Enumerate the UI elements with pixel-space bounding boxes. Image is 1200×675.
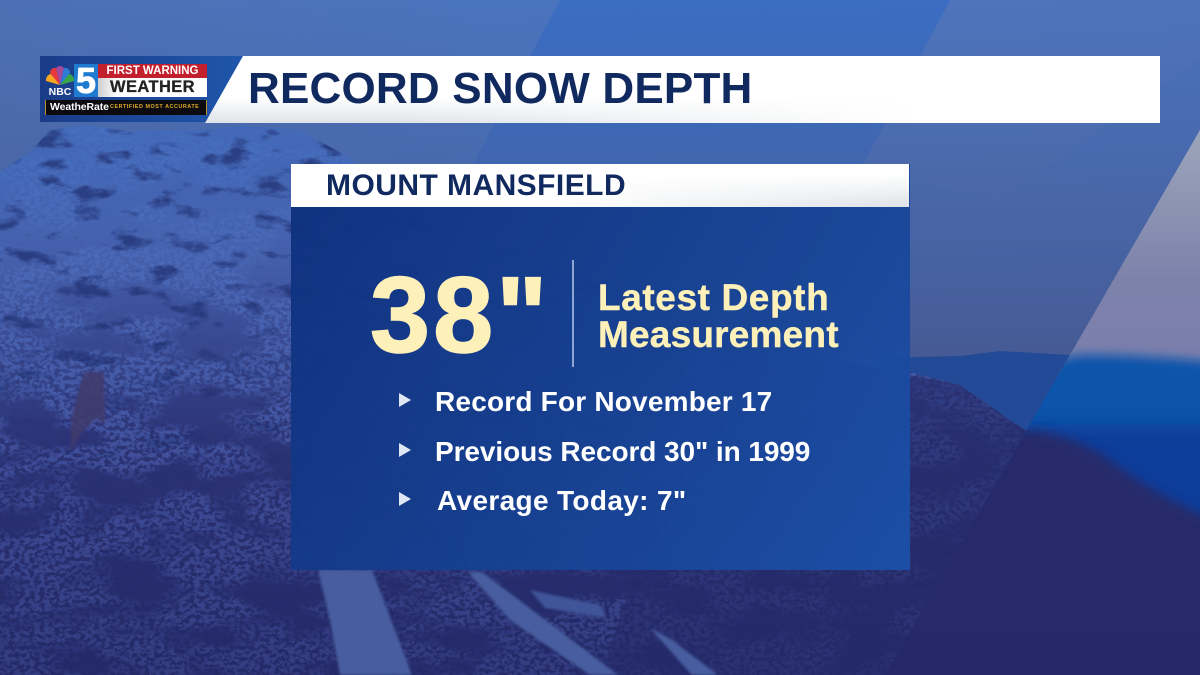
icon: NBC peacock [46,66,74,97]
right overlay triangle [860,130,1200,675]
weather banner: WEATHER [110,78,195,96]
panel heading: MOUNT MANSFIELD [326,169,626,202]
bullet: average today: Average Today: 7" [437,485,687,516]
title bar [205,56,1160,123]
dark forested ridge, right side [600,365,1040,675]
bullet: previous record: Previous Record 30" in 1999 [435,436,810,467]
latest depth label: Measurement [598,314,839,355]
divider line [572,260,574,367]
title: RECORD SNOW DEPTH [248,64,753,113]
rock face [70,372,105,452]
big number 38 inches: 38" [370,254,550,375]
mountain [0,125,1026,675]
WeatheRate strip: WeatheRate [50,101,109,113]
WeatheRate strip: CERTIFIED MOST ACCURATE [110,104,199,110]
distant hills [880,351,1100,470]
panel: Mount Mansfield [291,164,910,570]
channel number 5 [74,64,98,97]
bullet: record for November 17: Record For November 17 [435,386,772,417]
latest depth label: Latest Depth [598,277,829,318]
latest depth label [598,277,839,355]
panel heading [291,164,909,207]
WeatheRate strip [45,100,207,115]
channel number 5: 5 [76,60,96,101]
logo block: NBC 5 First Warning Weather [40,56,245,122]
first warning banner: FIRST WARNING [106,65,198,77]
ski trails [318,570,718,675]
sky shards [470,0,950,170]
bullet list [399,386,810,516]
